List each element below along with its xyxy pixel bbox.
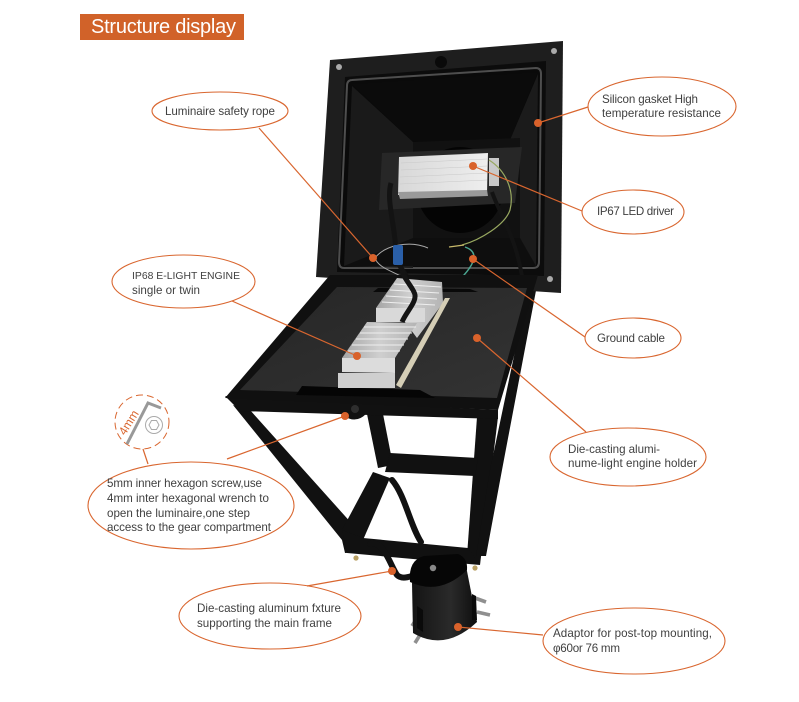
callout: IP68 E-LIGHT ENGINE [112,255,361,360]
callout: Silicon gasket: temperature resistance [602,107,721,120]
callout: 5mm inner hexagon screw: 4mm inter hexagonal wrench to [107,492,269,505]
frame screws [353,555,478,571]
callout: Die-casting aluminum light engine holder: nume-light engine holder [568,457,697,470]
callout: Adaptor for post-top mounting: Adaptor for post-top mounting, [553,627,712,640]
callout: Die-casting aluminum fixture [179,567,396,649]
LED light engine heat sinks [338,270,450,388]
open lid outer plate [316,41,563,293]
callout: Die-casting aluminum fixture: Die-casting aluminum fxture [197,602,341,615]
callout: Ground cable [469,255,681,358]
internal cable loop [370,480,421,578]
callout: 5mm inner hexagon screw: open the luminaire,one step [107,507,250,520]
callout: 5mm inner hexagon screw [88,412,349,549]
adaptor sleeve [410,554,490,643]
callout: Ground cable: Ground cable [597,332,665,345]
callout: IP68 E-LIGHT ENGINE: single or twin [132,284,200,297]
product: post-top luminaire [225,41,563,643]
callout: Silicon gasket: Silicon gasket High [602,93,698,106]
LED driver on mounting plate [379,147,522,210]
callout: IP68 E-LIGHT ENGINE: IP68 E-LIGHT ENGINE [132,271,240,282]
thumb screw hole [351,405,359,413]
callout: Die-casting aluminum fixture: supporting the main frame [197,617,332,630]
wrench icon with 4mm label [115,395,169,464]
callout: 5mm inner hexagon screw: 5mm inner hexagon screw,use [107,477,262,490]
die-casting tray [225,275,538,410]
callout: IP67 LED driver [469,162,684,234]
callout: Luminaire safety rope: Luminaire safety rope [165,105,275,118]
frame and legs [225,280,538,565]
callout: Adaptor for post-top mounting: φ60or 76 mm [553,642,620,655]
callout: Die-casting aluminum light engine holder: Die-casting alumi- [568,443,660,456]
callout: Silicon gasket [534,77,736,136]
cables [375,160,522,290]
title: Structure display: Structure display [91,16,236,38]
callout: Adaptor for post-top mounting [454,608,725,674]
callout: IP67 LED driver: IP67 LED driver [597,205,674,218]
callout: 5mm inner hexagon screw: access to the gear compartment [107,521,272,534]
callout: Die-casting aluminum light engine holder [473,334,706,486]
wrench icon with 4mm label: 4mm [116,408,142,438]
callout: Luminaire safety rope [152,92,377,262]
